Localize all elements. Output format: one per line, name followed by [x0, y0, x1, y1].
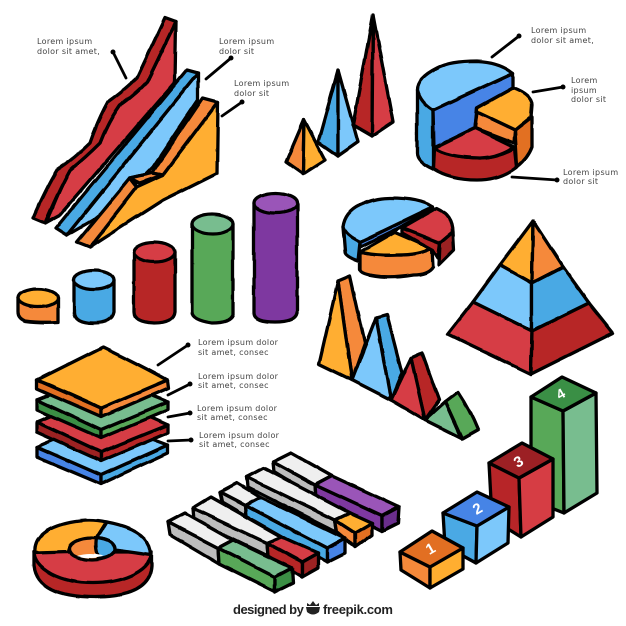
label: stack 2: sit amet, consec	[198, 381, 269, 390]
red bar	[193, 497, 318, 577]
footer credit: freepik.com	[323, 602, 393, 617]
blue pyramid	[318, 70, 358, 156]
box 2: 2	[470, 500, 486, 519]
blue layer	[37, 420, 168, 484]
label: area middle: dolor sit	[219, 47, 254, 56]
orange bar	[247, 468, 372, 547]
label: pie bottom: Lorem ipsum	[563, 168, 618, 177]
label: pie top: Lorem ipsum	[531, 26, 586, 35]
label: area left: Lorem ipsum	[37, 37, 92, 46]
box 4	[531, 377, 597, 513]
label: stack 4: sit amet, consec	[199, 440, 270, 449]
label: stack 4: Lorem ipsum dolor	[199, 431, 279, 440]
label: pie middle: Lorem	[571, 76, 598, 85]
label: stack 1: Lorem ipsum dolor	[198, 338, 278, 347]
label: area left: dolor sit amet,	[37, 47, 100, 56]
callouts for big pie	[492, 34, 566, 182]
footer credit	[233, 601, 393, 617]
blue bar	[220, 483, 345, 562]
big pyramid	[448, 221, 613, 374]
green cylinder	[192, 214, 233, 323]
numbered stairs	[400, 377, 597, 588]
box 1	[400, 531, 463, 588]
label: pie middle: dolor sit	[571, 95, 606, 104]
red pyramid	[353, 15, 393, 136]
label: stack 3: Lorem ipsum dolor	[197, 404, 277, 413]
mid pie chart	[343, 198, 454, 277]
orange ridge	[77, 98, 218, 247]
box 4: 4	[553, 385, 568, 403]
purple cylinder	[254, 193, 297, 322]
layered stack	[37, 347, 168, 484]
area chart: three ridges	[33, 18, 218, 247]
orange layer	[37, 347, 168, 417]
red layer	[37, 395, 168, 461]
label: stack 1: sit amet, consec	[198, 348, 269, 357]
icon: freepik crown	[306, 601, 320, 614]
donut chart	[34, 520, 152, 597]
box 3: 3	[511, 453, 527, 472]
label: area middle: Lorem ipsum	[219, 37, 274, 46]
orange cylinder	[18, 289, 58, 322]
orange pyramid	[286, 120, 325, 174]
label: area right: dolor sit	[234, 89, 269, 98]
label: area right: Lorem ipsum	[234, 79, 289, 88]
red cylinder	[134, 242, 175, 323]
box 1: 1	[423, 540, 439, 559]
callouts for stack	[158, 342, 194, 442]
footer credit: designed by	[233, 602, 305, 617]
bar chart: isometric bars	[168, 453, 399, 592]
label: pie top: dolor sit amet,	[531, 36, 594, 45]
callouts for area chart	[110, 50, 244, 116]
label: stack 2: Lorem ipsum dolor	[198, 372, 278, 381]
green peak	[425, 392, 478, 439]
label: pie middle: ipsum	[571, 86, 597, 95]
red peak	[391, 353, 439, 420]
box 2	[443, 492, 509, 563]
blue cylinder	[74, 270, 114, 323]
red ridge	[33, 18, 176, 223]
label: stack 3: sit amet, consec	[197, 413, 268, 422]
yellow peak	[319, 276, 365, 380]
blue ridge	[56, 70, 198, 235]
purple bar	[273, 453, 399, 531]
label: pie bottom: dolor sit	[563, 177, 598, 186]
blue peak	[352, 315, 402, 400]
green bar	[168, 513, 293, 592]
box 3	[489, 443, 553, 537]
big pie chart	[417, 61, 532, 180]
cylinders	[18, 193, 297, 323]
mountain chart	[319, 276, 478, 439]
small pyramids	[286, 15, 393, 174]
green layer	[37, 375, 168, 438]
